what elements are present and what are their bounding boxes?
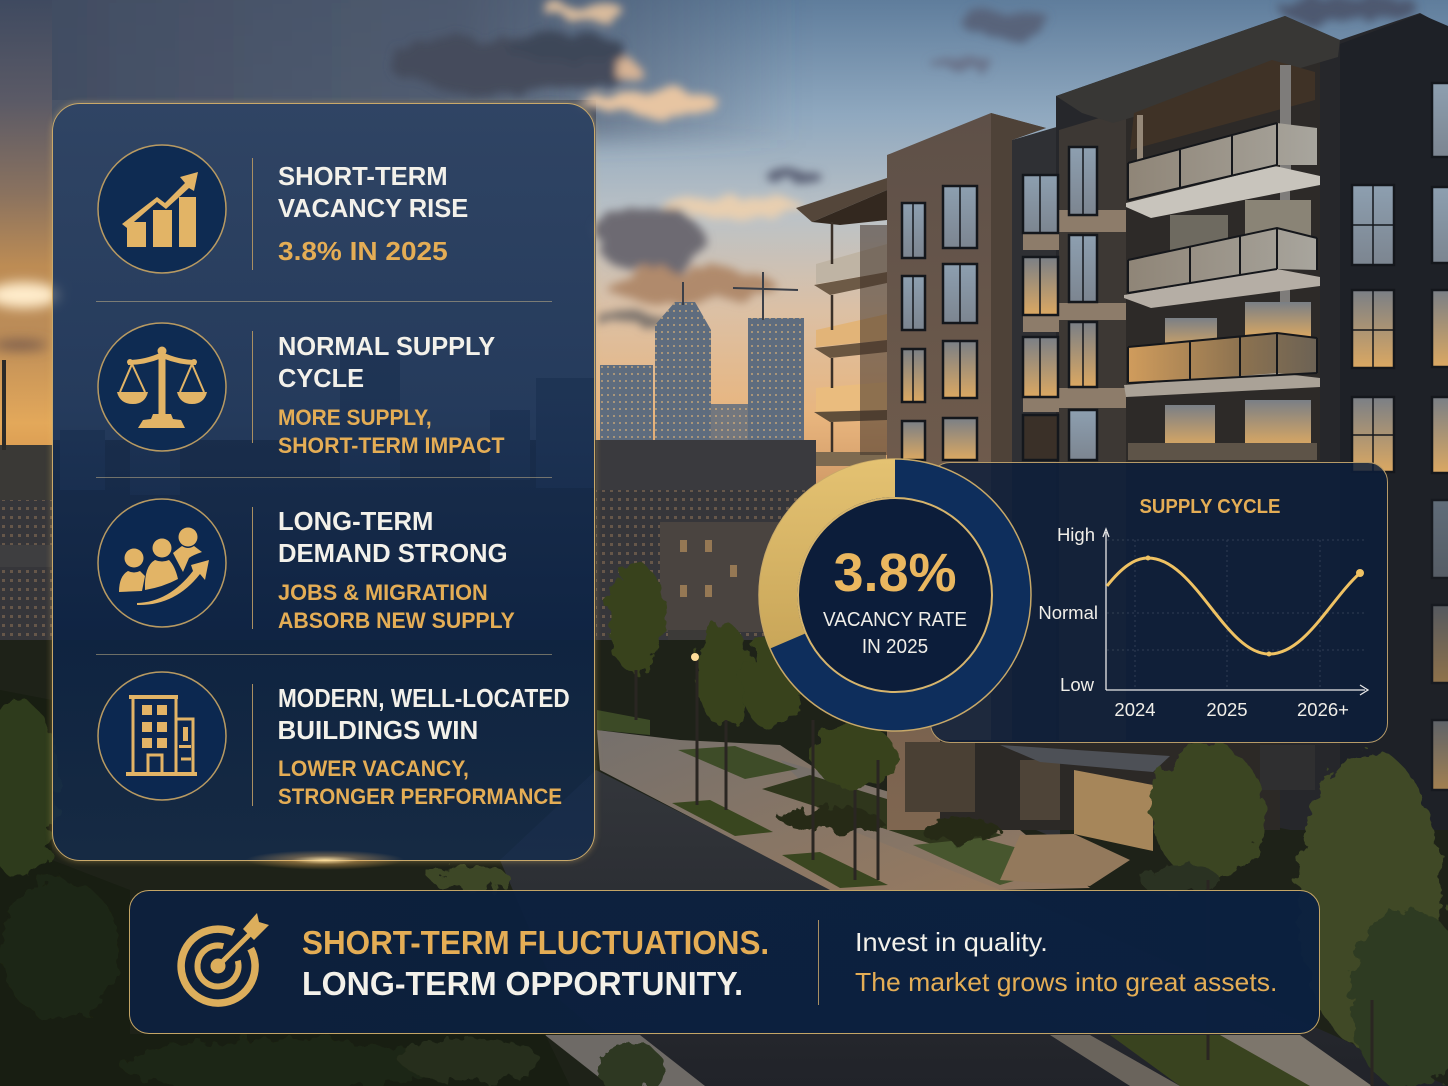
note: jobs and migration: JOBS & MIGRATION xyxy=(278,580,487,604)
line chart: supply cycle curve: Low xyxy=(1060,674,1094,694)
note: more supply: MORE SUPPLY, xyxy=(278,404,431,430)
entrance xyxy=(940,740,1280,830)
heading: short-term vacancy rise: SHORT-TERM xyxy=(278,160,447,190)
donut caption: IN 2025 xyxy=(862,635,928,658)
panel: key takeaways xyxy=(52,103,595,861)
icon: rising bar chart xyxy=(97,144,227,274)
chart title: SUPPLY CYCLE xyxy=(1139,494,1280,518)
main building xyxy=(1012,126,1060,840)
note: lower vacancy: LOWER VACANCY, xyxy=(278,756,468,780)
heading: modern, well-located buildings win: BUILDINGS WIN xyxy=(278,714,478,744)
heading: normal supply cycle: NORMAL SUPPLY xyxy=(278,330,495,360)
note: more supply xyxy=(278,404,504,458)
heading: modern, well-located buildings win: MODERN, WELL-LOCATED xyxy=(278,682,569,712)
donut caption: VACANCY RATE xyxy=(823,608,967,631)
line chart: supply cycle curve: High xyxy=(1056,524,1094,544)
balcony interiors xyxy=(1170,215,1228,255)
heading: long-term demand strong xyxy=(278,506,507,568)
distant skyline xyxy=(600,365,653,475)
note: lower vacancy xyxy=(278,756,562,808)
heading: long-term demand strong: DEMAND STRONG xyxy=(278,538,507,568)
icon: people with rising arrow xyxy=(97,498,227,628)
balcony glass and slabs xyxy=(1128,123,1317,200)
panel bottom glow xyxy=(245,850,405,870)
trees xyxy=(430,563,1448,1086)
takeaway text xyxy=(855,927,1277,997)
note: jobs and migration: ABSORB NEW SUPPLY xyxy=(278,608,514,632)
note: jobs and migration xyxy=(278,580,514,632)
windows xyxy=(902,83,1448,790)
panel: supply cycle chart xyxy=(930,462,1388,743)
line chart: supply cycle curve xyxy=(1038,524,1370,720)
headline xyxy=(302,924,769,1002)
icon: apartment building xyxy=(97,671,227,801)
takeaway text: The market grows into great assets. xyxy=(855,967,1277,997)
line chart: supply cycle curve: 2024 xyxy=(1114,698,1155,720)
heading: modern, well-located buildings win xyxy=(278,682,569,744)
heading: long-term demand strong: LONG-TERM xyxy=(278,506,433,536)
takeaway text: Invest in quality. xyxy=(855,927,1048,957)
icon: balance scales xyxy=(97,322,227,452)
ground xyxy=(0,640,1448,1086)
banner: conclusion xyxy=(129,890,1320,1034)
canopy and roof xyxy=(1056,16,1340,123)
line chart: supply cycle curve: Normal xyxy=(1038,602,1098,622)
headline: SHORT-TERM FLUCTUATIONS. xyxy=(302,924,769,961)
donut value: 3.8% xyxy=(833,543,957,603)
donut caption xyxy=(823,608,967,658)
donut chart: 3.8% vacancy rate xyxy=(758,458,1032,732)
foreground foliage xyxy=(0,690,570,1086)
heading: short-term vacancy rise xyxy=(278,160,468,222)
note: lower vacancy: STRONGER PERFORMANCE xyxy=(278,784,562,808)
heading: normal supply cycle: CYCLE xyxy=(278,362,364,392)
mid-ground apartment blocks xyxy=(596,490,816,660)
headline: LONG-TERM OPPORTUNITY. xyxy=(302,965,743,1002)
line chart: supply cycle curve: 2025 xyxy=(1206,698,1247,720)
line chart: supply cycle curve: 2026+ xyxy=(1297,698,1348,720)
heading: normal supply cycle xyxy=(278,330,495,392)
icon: target with arrow xyxy=(177,913,269,1007)
stat: 3.8% in 2025: 3.8% IN 2025 xyxy=(278,236,447,266)
heading: short-term vacancy rise: VACANCY RISE xyxy=(278,192,468,222)
note: more supply: SHORT-TERM IMPACT xyxy=(278,432,504,458)
